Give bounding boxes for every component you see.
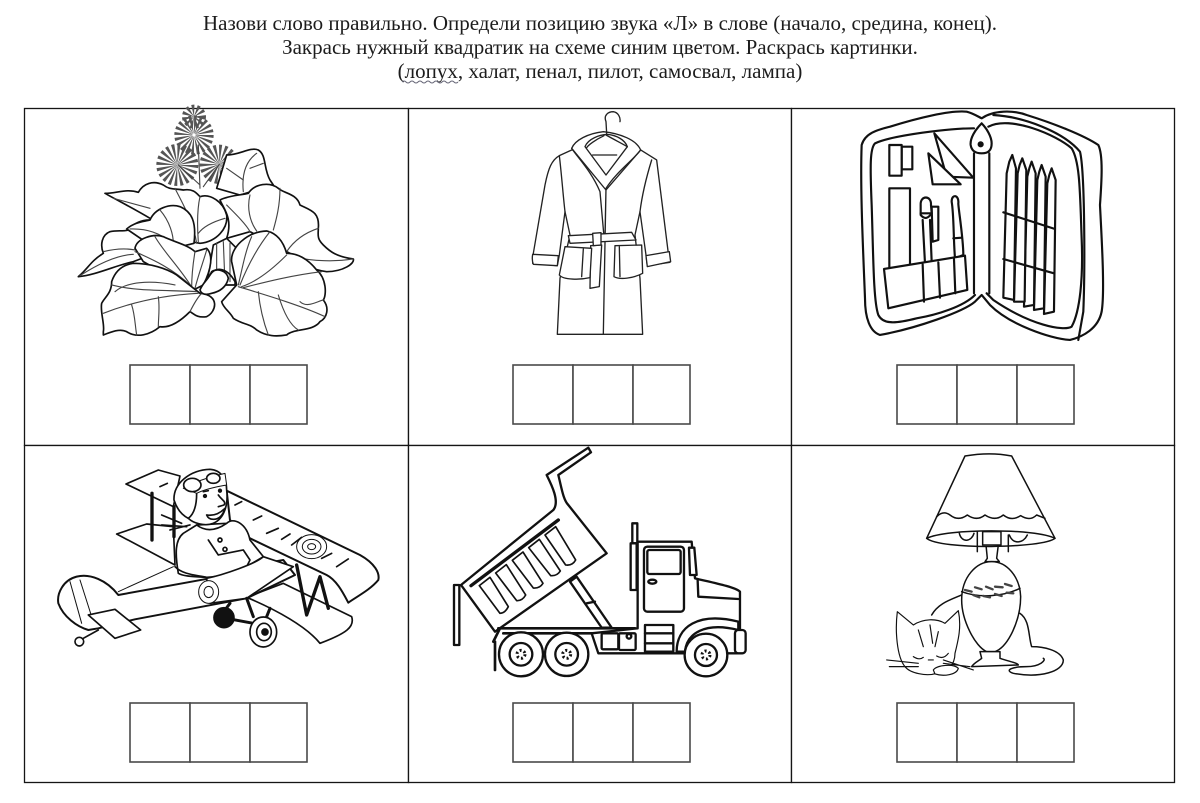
panel: dump truck xyxy=(408,446,792,782)
title: instructions: Закрась нужный квадратик на схеме синим цветом. Раскрась картинки. xyxy=(282,35,918,59)
answer boxes xyxy=(130,365,307,424)
title: instructions xyxy=(203,11,997,83)
icon: pencil case xyxy=(861,111,1103,340)
icon: burdock xyxy=(78,111,353,336)
icon: dump truck xyxy=(454,448,746,676)
panel: lamp xyxy=(792,446,1174,782)
panel: pencil case xyxy=(792,108,1174,446)
icon: bathrobe xyxy=(532,112,671,334)
answer boxes xyxy=(513,365,690,424)
icon: pilot in biplane xyxy=(58,469,379,647)
answer boxes xyxy=(897,703,1074,762)
answer boxes xyxy=(513,703,690,762)
panel: bathrobe xyxy=(408,108,792,446)
title: instructions: (лопух, халат, пенал, пилот, самосвал, лампа) xyxy=(398,59,802,83)
title: instructions: Назови слово правильно. Определи позицию звука «Л» в слове (начало, средина, конец). xyxy=(203,11,997,35)
panel: pilot xyxy=(24,446,408,782)
answer boxes xyxy=(897,365,1074,424)
panel: burdock xyxy=(24,108,408,446)
icon: lamp with sleeping cat xyxy=(887,454,1063,675)
answer boxes xyxy=(130,703,307,762)
